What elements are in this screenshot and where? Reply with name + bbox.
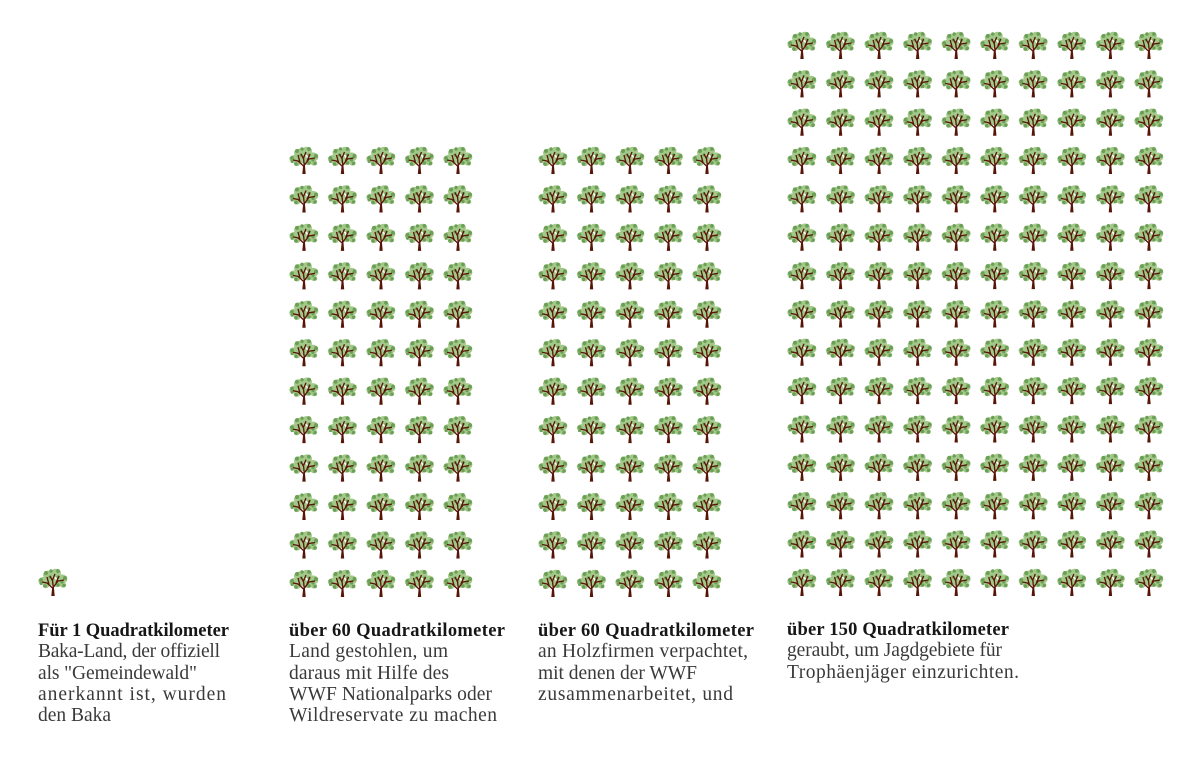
text block: hunting caption: über 150 Quadratkilometer bbox=[787, 620, 1009, 640]
icon: single tree bbox=[38, 569, 67, 596]
text block: hunting caption: Trophäenjäger einzurichten. bbox=[787, 662, 1019, 683]
panel: Gemeindewald, 1 square kilometre bbox=[38, 569, 229, 726]
text block: Gemeindewald caption: anerkannt ist, wurden bbox=[38, 684, 226, 705]
text block: logging caption bbox=[538, 621, 754, 705]
pictogram: 60 trees, 5 by 12 bbox=[538, 147, 721, 597]
text block: logging caption: an Holzfirmen verpachtet, bbox=[538, 641, 748, 662]
panel: national parks, over 60 square kilometres bbox=[289, 147, 505, 726]
text block: national parks caption: WWF Nationalparks oder bbox=[289, 684, 492, 705]
panel: logging concessions, over 60 square kilometres bbox=[538, 147, 754, 705]
text block: national parks caption: Land gestohlen, um bbox=[289, 641, 448, 662]
text block: Gemeindewald caption: Für 1 Quadratkilometer bbox=[38, 621, 229, 641]
text block: logging caption: zusammenarbeitet, und bbox=[538, 684, 733, 705]
text block: hunting caption bbox=[787, 620, 1019, 683]
panel: hunting areas, over 150 square kilometres bbox=[787, 32, 1163, 683]
text block: logging caption: über 60 Quadratkilometer bbox=[538, 621, 754, 641]
text block: logging caption: mit denen der WWF bbox=[538, 663, 697, 684]
text block: Gemeindewald caption: Baka-Land, der offiziell bbox=[38, 641, 221, 662]
text block: national parks caption bbox=[289, 621, 505, 726]
text block: national parks caption: Wildreservate zu machen bbox=[289, 705, 497, 726]
text block: national parks caption: über 60 Quadratkilometer bbox=[289, 621, 505, 641]
text block: national parks caption: daraus mit Hilfe des bbox=[289, 663, 449, 684]
text block: hunting caption: geraubt, um Jagdgebiete für bbox=[787, 640, 1002, 661]
text block: Gemeindewald caption: als "Gemeindewald" bbox=[38, 663, 197, 684]
text block: Gemeindewald caption bbox=[38, 621, 229, 726]
pictogram: 150 trees, 10 by 15 bbox=[787, 32, 1163, 596]
pictogram: 60 trees, 5 by 12 bbox=[289, 147, 472, 597]
text block: Gemeindewald caption: den Baka bbox=[38, 705, 111, 726]
